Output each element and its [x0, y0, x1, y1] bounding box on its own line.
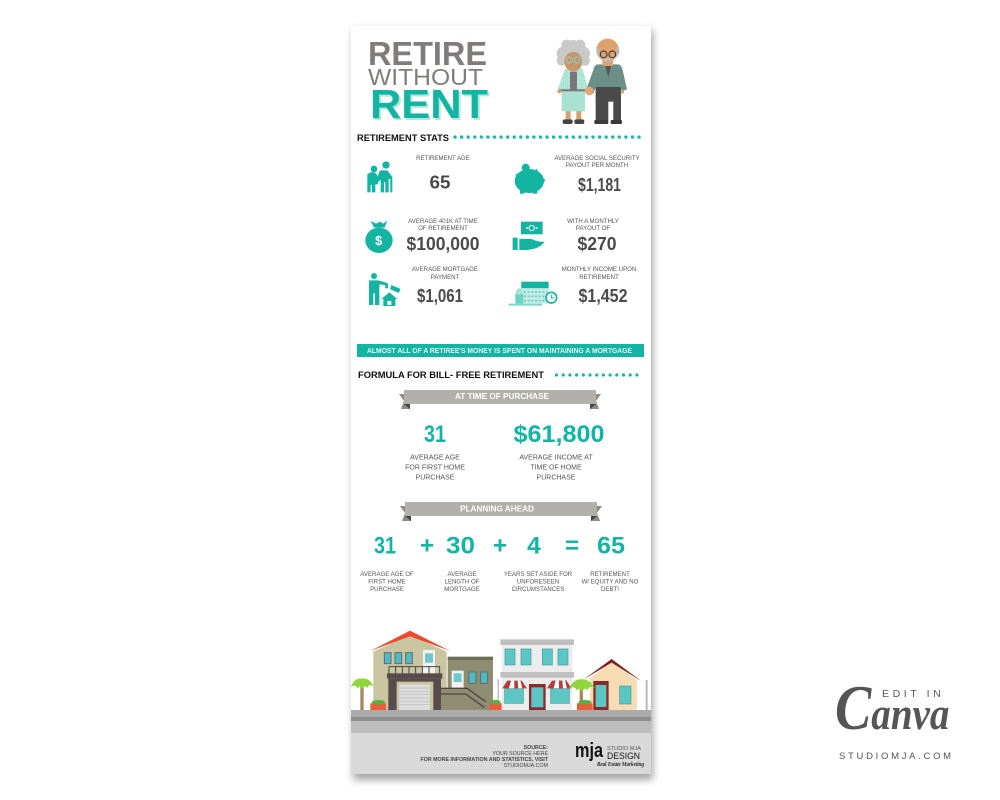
icon: elderly pair: [367, 161, 392, 192]
stat: average age first purchase: PURCHASE: [416, 474, 455, 482]
stat: mortgage payment: AVERAGE MORTGAGE: [412, 266, 478, 273]
stat: 401k: AVERAGE 401K AT TIME: [408, 218, 478, 225]
stat: retirement age: [416, 155, 470, 192]
source text: SOURCE:: [524, 745, 548, 751]
heading: retirement stats: RETIREMENT STATS: [357, 133, 450, 144]
icon: hand with bill: [513, 222, 545, 250]
caption: first purchase: FIRST HOME: [368, 578, 406, 586]
stat: retirement age: 65: [430, 172, 450, 192]
ribbon: planning ahead: PLANNING AHEAD: [460, 504, 534, 514]
stat: monthly payout: PAYOUT OF: [576, 225, 610, 232]
caption: years set aside: CIRCUMSTANCES: [512, 586, 564, 593]
equation: +: [493, 532, 507, 560]
stat: average age first purchase: AVERAGE AGE: [410, 454, 460, 462]
caption: years set aside: [504, 571, 573, 593]
ribbon: at time of purchase: AT TIME OF PURCHASE: [455, 392, 550, 401]
icon: piggy bank: [515, 164, 545, 194]
stat: 401k: [406, 218, 480, 254]
watermark: edit in canva: STUDIOMJA.COM: [839, 751, 954, 762]
caption: mortgage length: MORTGAGE: [444, 586, 480, 593]
equation: 31: [374, 532, 396, 560]
equation: 4: [527, 532, 541, 560]
stat: average income: TIME OF HOME: [530, 464, 582, 472]
icon: calendar, coins and clock: [509, 282, 557, 306]
caption: mortgage length: AVERAGE: [447, 571, 477, 578]
logo: studio mja design: [575, 740, 645, 768]
stat: average age first purchase: FOR FIRST HOME: [405, 464, 465, 472]
stat: average age first purchase: 31: [424, 421, 446, 448]
equation: =: [565, 532, 579, 560]
equation: 65: [597, 532, 625, 560]
source text: FOR MORE INFORMATION AND STATISTICS, VISIT: [420, 757, 549, 763]
logo: studio mja design: Real Estate Marketing: [596, 761, 645, 768]
banner: key message: ALMOST ALL OF A RETIREE'S MONEY IS SPENT ON MAINTAINING A MORTGAGE: [367, 346, 632, 355]
equation: [374, 532, 625, 560]
stat: social security: PAYOUT PER MONTH: [566, 162, 628, 169]
illustration: street of houses: [351, 631, 651, 733]
heading: formula: FORMULA FOR BILL- FREE RETIREMENT: [358, 370, 544, 381]
caption: retirement: W/ EQUITY AND NO: [582, 578, 639, 586]
stat: average income: [514, 421, 604, 482]
caption: mortgage length: [444, 571, 480, 593]
caption: years set aside: YEARS SET ASIDE FOR: [504, 571, 573, 578]
stat: social security: [554, 155, 640, 195]
stat: average income: $61,800: [514, 421, 604, 448]
stat: social security: $1,181: [578, 175, 621, 195]
icon: money bag: $: [375, 234, 382, 248]
logo: studio mja design: mja: [575, 740, 604, 762]
stat: monthly payout: $270: [578, 234, 616, 254]
stat: monthly income: MONTHLY INCOME UPON: [562, 266, 636, 273]
icon: elderly couple: [557, 39, 627, 124]
logo: studio mja design: DESIGN: [607, 751, 640, 761]
caption: years set aside: UNFORESEEN: [517, 578, 559, 586]
stat: monthly payout: WITH A MONTHLY: [567, 218, 619, 225]
source text: STUDIOMJA.COM: [504, 763, 548, 769]
stat: mortgage payment: PAYMENT: [431, 274, 460, 281]
stat: average income: AVERAGE INCOME AT: [519, 454, 593, 462]
equation: 30: [446, 532, 475, 560]
ribbon: at time of purchase: [399, 390, 601, 409]
title: RENT: [370, 81, 488, 127]
stat: average age first purchase: [405, 421, 465, 482]
logo: studio mja design: STUDIO MJA: [607, 746, 641, 752]
icon: person selling home: [369, 273, 401, 306]
watermark: edit in canva: EDIT IN: [882, 688, 944, 700]
title: WITHOUT: [368, 64, 483, 90]
watermark: edit in canva: Canva: [835, 672, 949, 743]
stat: mortgage payment: $1,061: [417, 286, 463, 306]
caption: first purchase: PURCHASE: [370, 586, 404, 593]
stat: 401k: OF RETIREMENT: [418, 225, 468, 232]
ribbon: planning ahead: [400, 502, 602, 521]
caption: retirement: RETIREMENT: [590, 571, 630, 578]
title: RENT: [372, 83, 490, 129]
icon: money bag: [365, 220, 393, 253]
stat: social security: AVERAGE SOCIAL SECURITY: [554, 155, 640, 162]
caption: retirement: [582, 571, 639, 593]
title: [368, 35, 490, 129]
equation: +: [420, 532, 434, 560]
panel: infographic poster: [351, 26, 653, 780]
stat: retirement age: RETIREMENT AGE: [416, 155, 470, 162]
title: RETIRE: [368, 35, 487, 72]
stat: mortgage payment: [412, 266, 478, 306]
source text: YOUR SOURCE HERE: [492, 751, 548, 757]
caption: first purchase: AVERAGE AGE OF: [360, 571, 414, 578]
caption: retirement: DEBT!: [601, 586, 619, 593]
source text: [420, 745, 549, 769]
panel: footer: [351, 733, 651, 774]
stat: monthly income: $1,452: [578, 286, 628, 306]
stat: monthly payout: [567, 218, 619, 254]
caption: first purchase: [360, 571, 414, 593]
stat: monthly income: [562, 266, 636, 306]
stat: average income: PURCHASE: [537, 474, 576, 482]
caption: mortgage length: LENGTH OF: [445, 578, 480, 586]
stat: 401k: $100,000: [406, 234, 480, 254]
banner: key message: [357, 344, 644, 357]
stat: monthly income: RETIREMENT: [579, 274, 619, 281]
